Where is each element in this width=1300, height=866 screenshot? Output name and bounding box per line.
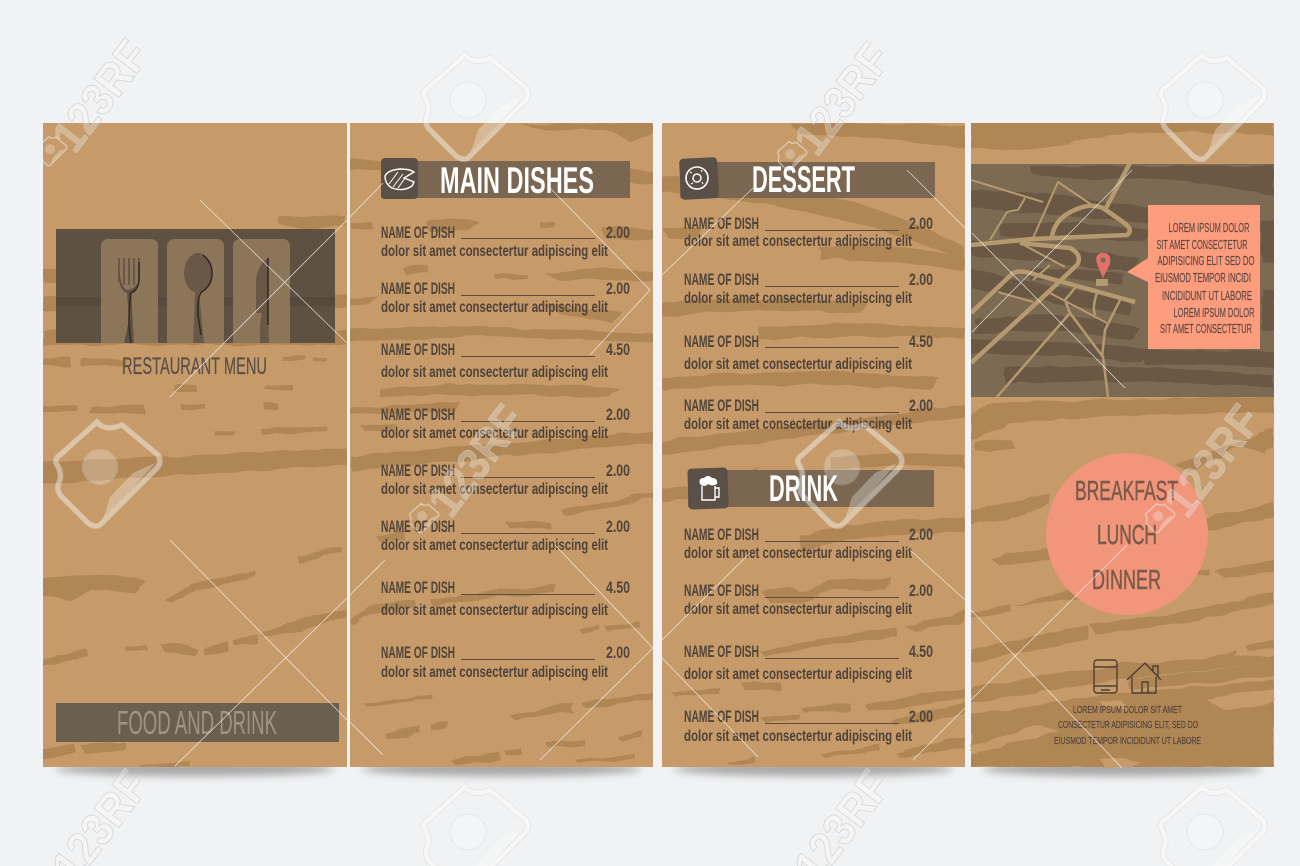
icon: donut — [679, 157, 719, 200]
menu item 7: 4.50 — [606, 578, 630, 597]
icon: fork card — [101, 239, 158, 343]
panel: cover — [43, 123, 347, 767]
drink item 3 — [684, 642, 933, 683]
dessert item 3: 4.50 — [909, 332, 933, 351]
dessert item 4: dolor sit amet consectertur adipiscing elit — [684, 416, 912, 433]
menu item 1: 2.00 — [606, 223, 630, 242]
drink item 2: 2.00 — [909, 581, 933, 600]
menu item 8: 2.00 — [606, 643, 630, 662]
contact text: EIUSMOD TEMPOR INCIDIDUNT UT LABORE — [1054, 735, 1201, 747]
menu item 3 — [381, 340, 630, 381]
drink item 1 — [684, 525, 933, 562]
watermark: 123RF marks: 123RF — [42, 30, 159, 161]
heading bar: dessert — [679, 157, 935, 200]
panel shadows — [55, 762, 1262, 776]
dessert item 1: NAME OF DISH — [684, 214, 759, 233]
menu item 2: 2.00 — [606, 279, 630, 298]
contact text — [1054, 704, 1201, 747]
icon: spoon card — [167, 239, 224, 343]
menu item 7 — [381, 578, 630, 619]
menu item 1 — [381, 223, 630, 260]
dessert item 3: NAME OF DISH — [684, 332, 759, 351]
menu item 8: NAME OF DISH — [381, 643, 455, 662]
icon: fish steak — [381, 158, 418, 199]
circle: meal times — [1046, 453, 1208, 615]
dessert item 3 — [684, 332, 933, 373]
dessert item 2: dolor sit amet consectertur adipiscing elit — [684, 290, 912, 307]
menu item 6: dolor sit amet consectertur adipiscing elit — [381, 537, 608, 554]
menu item 4 — [381, 405, 630, 442]
drink item 3: NAME OF DISH — [684, 642, 759, 661]
dessert item 3: dolor sit amet consectertur adipiscing elit — [684, 356, 912, 373]
drink item 4: 2.00 — [909, 707, 933, 726]
panel edge highlight — [347, 123, 350, 767]
circle: meal times: LUNCH — [1097, 519, 1157, 550]
circle: meal times: BREAKFAST — [1075, 475, 1178, 506]
panel: contact — [971, 120, 1274, 767]
menu item 1: NAME OF DISH — [381, 223, 455, 242]
drink item 4 — [684, 707, 933, 745]
menu item 1: dolor sit amet consectertur adipiscing elit — [381, 243, 608, 260]
watermark: egg logo row 1 — [424, 55, 1265, 159]
menu item 7: dolor sit amet consectertur adipiscing elit — [381, 602, 608, 619]
menu item 5: 2.00 — [606, 461, 630, 480]
menu item 5: NAME OF DISH — [381, 461, 455, 480]
roads — [971, 163, 1135, 397]
drink item 3: dolor sit amet consectertur adipiscing elit — [684, 666, 912, 683]
drink item 2: NAME OF DISH — [684, 581, 759, 600]
watermark: egg logo row 3 — [424, 787, 1265, 866]
drink item 1: 2.00 — [909, 525, 933, 544]
heading bar: drink: DRINK — [769, 468, 838, 509]
menu item 4: 2.00 — [606, 405, 630, 424]
dessert item 1 — [684, 214, 933, 250]
restaurant menu label: RESTAURANT MENU — [122, 353, 267, 380]
drink item 1: NAME OF DISH — [684, 525, 759, 544]
icon: knife card — [233, 239, 290, 343]
menu item 8: dolor sit amet consectertur adipiscing elit — [381, 664, 608, 681]
menu item 7: NAME OF DISH — [381, 578, 455, 597]
drink item 2: dolor sit amet consectertur adipiscing elit — [684, 601, 912, 618]
menu item 6: NAME OF DISH — [381, 517, 455, 536]
menu item 3: NAME OF DISH — [381, 340, 455, 359]
menu item 3: dolor sit amet consectertur adipiscing elit — [381, 364, 608, 381]
drink item 2 — [684, 581, 933, 618]
watermark: egg logo row 2 — [56, 422, 902, 526]
dessert item 4: NAME OF DISH — [684, 396, 759, 415]
dessert item 1: 2.00 — [909, 214, 933, 233]
drink item 4: dolor sit amet consectertur adipiscing elit — [684, 728, 912, 745]
icon: phone — [1094, 660, 1117, 693]
watermark: 123RF marks: 123RF — [784, 33, 901, 164]
heading bar: dessert: DESSERT — [752, 159, 855, 200]
dessert item 1: dolor sit amet consectertur adipiscing elit — [684, 233, 912, 250]
callout — [1127, 205, 1260, 349]
circle: meal times: DINNER — [1092, 564, 1161, 595]
footer bar: FOOD AND DRINK — [117, 704, 277, 741]
map — [971, 163, 1274, 397]
menu item 5: dolor sit amet consectertur adipiscing elit — [381, 481, 608, 498]
icon: beer mug — [687, 467, 729, 510]
dessert item 2: NAME OF DISH — [684, 270, 759, 289]
menu item 2: dolor sit amet consectertur adipiscing elit — [381, 299, 608, 316]
footer bar — [56, 703, 339, 742]
drink item 4: NAME OF DISH — [684, 707, 759, 726]
menu item 8 — [381, 643, 630, 681]
menu item 2: NAME OF DISH — [381, 279, 455, 298]
watermark lines — [170, 170, 1132, 768]
menu item 4: NAME OF DISH — [381, 405, 455, 424]
dessert item 4: 2.00 — [909, 396, 933, 415]
lighter patches in lower wood — [971, 690, 1274, 767]
menu item 2 — [381, 279, 630, 316]
heading bar: main dishes — [381, 158, 630, 201]
panel: dessert and drink — [662, 123, 965, 767]
logo panel with cutlery — [56, 229, 335, 343]
drink item 1: dolor sit amet consectertur adipiscing elit — [684, 545, 912, 562]
heading bar: main dishes: MAIN DISHES — [440, 160, 594, 201]
contact text: LOREM IPSUM DOLOR SIT AMET — [1073, 704, 1182, 716]
dessert item 4 — [684, 396, 933, 433]
dessert item 2: 2.00 — [909, 270, 933, 289]
heading bar: drink — [687, 467, 934, 510]
icon: house — [1127, 663, 1161, 693]
menu item 6: 2.00 — [606, 517, 630, 536]
watermark: 123RF marks: 123RF — [418, 395, 535, 526]
contact text: CONSECTETUR ADIPISICING ELIT, SED DO — [1058, 719, 1198, 731]
menu item 4: dolor sit amet consectertur adipiscing elit — [381, 425, 608, 442]
panel: main dishes — [350, 123, 653, 767]
menu item 3: 4.50 — [606, 340, 630, 359]
menu item 5 — [381, 461, 630, 498]
icon: location pin — [1096, 253, 1110, 286]
drink item 3: 4.50 — [909, 642, 933, 661]
dessert item 2 — [684, 270, 933, 307]
watermark: 123RF marks: 123RF — [1154, 395, 1271, 526]
menu item 6 — [381, 517, 630, 554]
callout: LOREM IPSUM DOLOR — [1168, 221, 1250, 235]
